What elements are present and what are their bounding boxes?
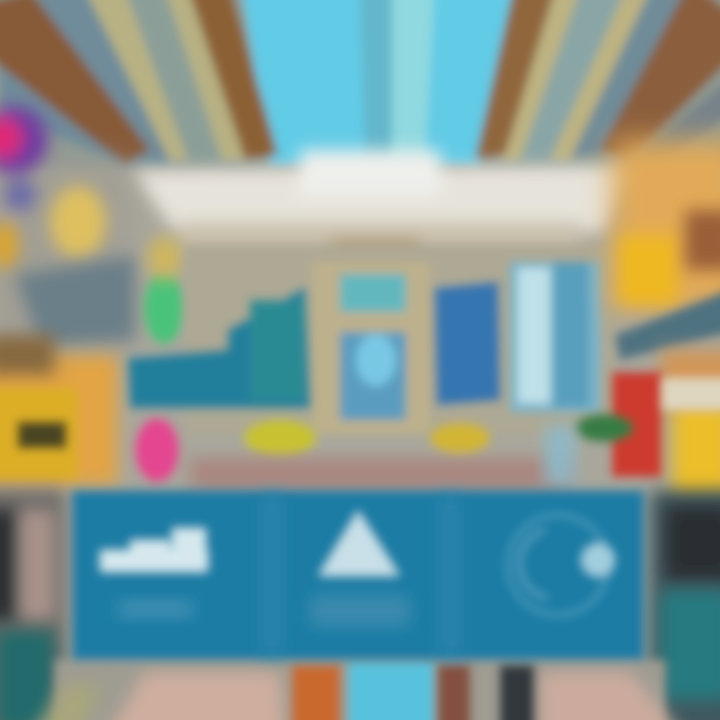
pink stall xyxy=(135,418,179,482)
lower edges and floor xyxy=(0,490,720,720)
orange figure xyxy=(292,665,340,720)
centre panels xyxy=(128,245,615,435)
panel: blue banner xyxy=(72,490,644,660)
dark red figure xyxy=(438,665,470,720)
dark green stall xyxy=(575,414,633,442)
icon: centre white triangle xyxy=(318,510,400,576)
green sign xyxy=(144,272,184,344)
blue right panel xyxy=(435,282,500,405)
left caption xyxy=(118,600,193,618)
left shopfront colours xyxy=(0,106,184,355)
row of coloured stalls xyxy=(135,414,633,490)
left orange shop xyxy=(0,335,118,485)
icon: left white chart mark xyxy=(100,528,208,572)
teal left panel xyxy=(128,288,310,408)
white gallery band xyxy=(130,150,640,262)
pale stall xyxy=(545,425,575,485)
centre caption xyxy=(310,595,410,627)
centre crowd xyxy=(190,458,570,490)
yellow shop xyxy=(672,405,720,500)
pale window panel xyxy=(510,262,600,412)
right shopfront colours xyxy=(612,140,720,500)
colourful round sign xyxy=(0,106,48,269)
cyan floor reflection xyxy=(348,662,434,720)
grey awning xyxy=(15,255,135,345)
ceiling with skylight and beams xyxy=(0,0,720,170)
red pillar xyxy=(612,372,662,477)
yellow stall xyxy=(430,423,490,453)
tan centre frame xyxy=(185,245,615,435)
icon: right ring with dot xyxy=(508,515,615,615)
vertical panel seams xyxy=(262,495,460,655)
dark figure xyxy=(500,665,534,720)
yellow lantern xyxy=(50,186,106,258)
yellow top of green sign xyxy=(147,236,183,280)
yellow-green stall xyxy=(244,420,316,456)
grey-teal balcony xyxy=(615,285,720,360)
